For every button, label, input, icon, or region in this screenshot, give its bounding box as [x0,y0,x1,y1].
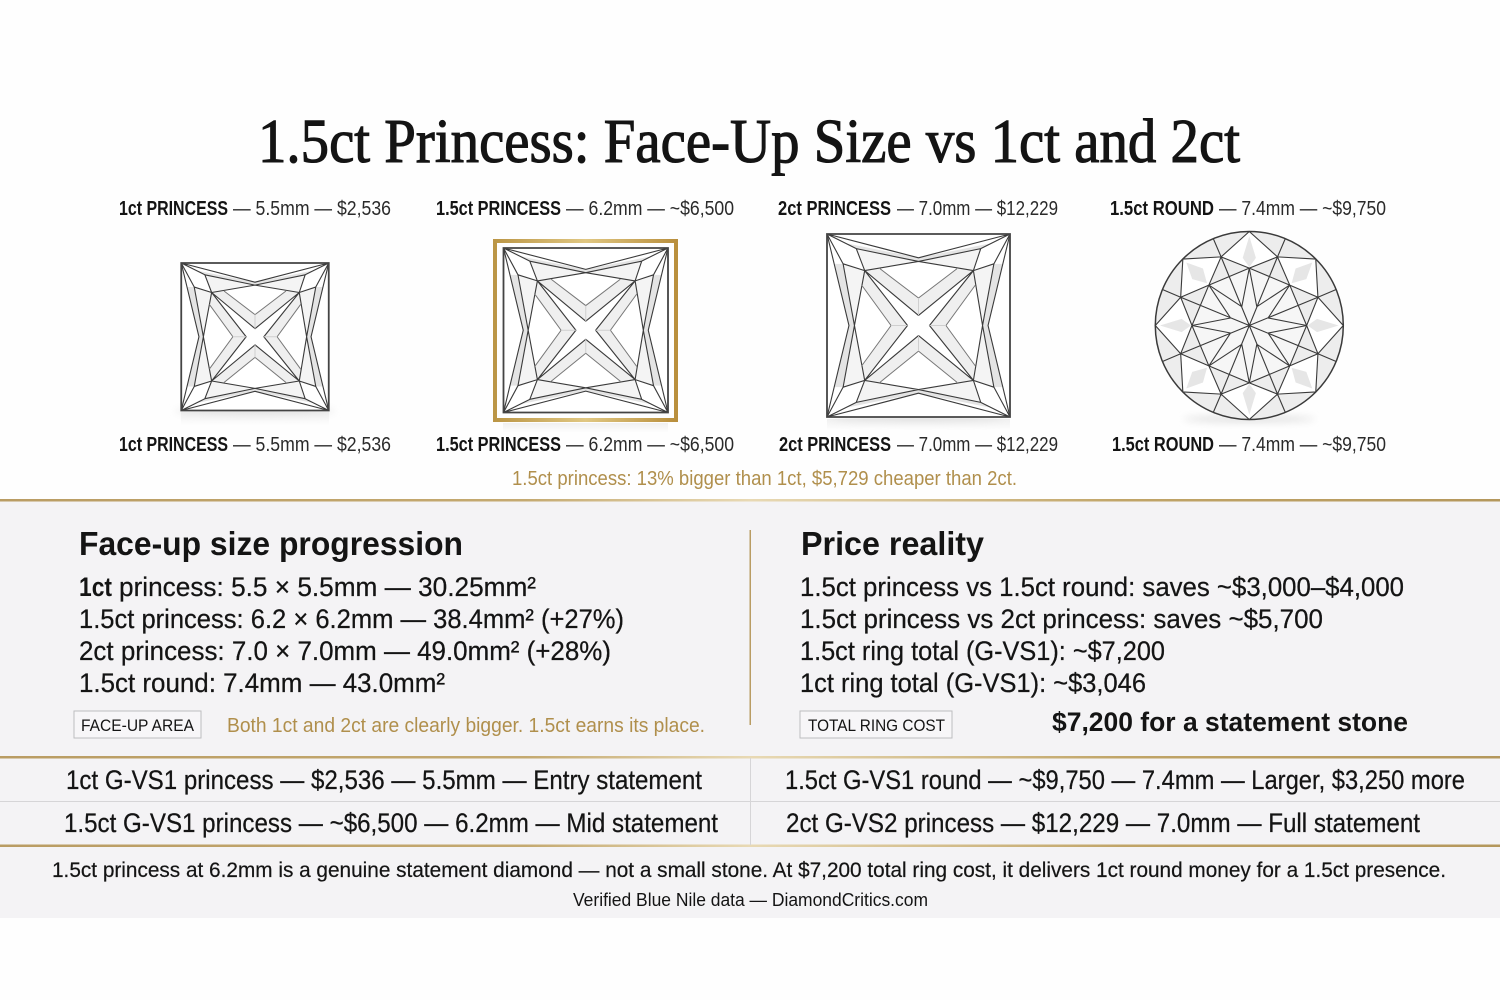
tag: total ring cost [800,711,952,738]
bottom labels row: — 6.2mm — ~$6,500 [566,434,734,456]
panel: price reality [800,525,1408,738]
tag: face-up area: FACE-UP AREA [81,716,195,735]
diamond: 1.5ct princess with gold frame [495,241,676,433]
top labels row: 1.5ct ROUND [1110,198,1214,220]
source line: Verified Blue Nile data — DiamondCritics.com [573,890,928,910]
price list: 1.5ct princess vs 1.5ct round: saves ~$3,000–$4,000 [800,572,1404,602]
price callout: $7,200 for a statement stone [1052,707,1408,737]
tag: face-up area [74,711,201,738]
diamond: 1.5ct round [1155,232,1343,422]
size list [79,572,624,698]
gold divider lines [0,499,1500,847]
top labels row: — 6.2mm — ~$6,500 [566,198,734,220]
size list: 1.5ct princess: 6.2 × 6.2mm — 38.4mm² (+27%) [79,604,624,634]
gold comparison note: 1.5ct princess: 13% bigger than 1ct, $5,729 cheaper than 2ct. [512,468,1017,490]
bottom labels row: 1.5ct ROUND [1112,434,1214,456]
heading: price reality: Price reality [801,525,985,562]
footer summary: 1.5ct princess at 6.2mm is a genuine statement diamond — not a small stone. At $7,200 total ring cost, it delivers 1ct round money for a 1.5ct presence. [52,859,1446,882]
bottom labels row [119,434,1386,456]
title: 1.5ct Princess: Face-Up Size vs 1ct and 2ct [258,108,1240,176]
comparison table: 1.5ct G-VS1 princess — ~$6,500 — 6.2mm — Mid statement [64,808,718,838]
data panel background [0,500,1500,918]
tag: total ring cost: TOTAL RING COST [808,716,945,735]
price list: 1ct ring total (G-VS1): ~$3,046 [800,668,1146,698]
diamond: 2ct princess [827,234,1010,431]
price list [800,572,1404,698]
price list: 1.5ct princess vs 2ct princess: saves ~$5,700 [800,604,1323,634]
top labels row: 1ct PRINCESS [119,198,228,220]
comparison table: 2ct G-VS2 princess — $12,229 — 7.0mm — Full statement [786,808,1420,838]
bottom labels row: — 7.4mm — ~$9,750 [1219,434,1386,456]
bottom labels row: 1ct PRINCESS [119,434,228,456]
bottom labels row: — 5.5mm — $2,536 [233,434,391,456]
top labels row [119,198,1386,220]
top labels row: — 7.0mm — $12,229 [897,198,1058,220]
top labels row: 1.5ct PRINCESS [436,198,561,220]
diamond: 1ct princess [175,263,335,426]
comparison table: 1ct G-VS1 princess — $2,536 — 5.5mm — Entry statement [66,765,702,795]
top labels row: — 7.4mm — ~$9,750 [1219,198,1386,220]
top labels row: — 5.5mm — $2,536 [233,198,391,220]
panel: face-up size progression [74,525,705,738]
price list: 1.5ct ring total (G-VS1): ~$7,200 [800,636,1165,666]
size list: 1ct [79,572,112,602]
bottom labels row: 1.5ct PRINCESS [436,434,561,456]
comparison table [64,765,1465,838]
gold takeaway: Both 1ct and 2ct are clearly bigger. 1.5ct earns its place. [227,715,705,737]
top labels row: 2ct PRINCESS [778,198,891,220]
size list: 1.5ct round: 7.4mm — 43.0mm² [79,668,445,698]
heading: face-up size progression: Face-up size progression [79,525,463,562]
size list: 2ct princess: 7.0 × 7.0mm — 49.0mm² (+28%) [79,636,611,666]
bottom labels row: 2ct PRINCESS [779,434,891,456]
size list: princess: 5.5 × 5.5mm — 30.25mm² [119,572,536,602]
bottom labels row: — 7.0mm — $12,229 [897,434,1058,456]
